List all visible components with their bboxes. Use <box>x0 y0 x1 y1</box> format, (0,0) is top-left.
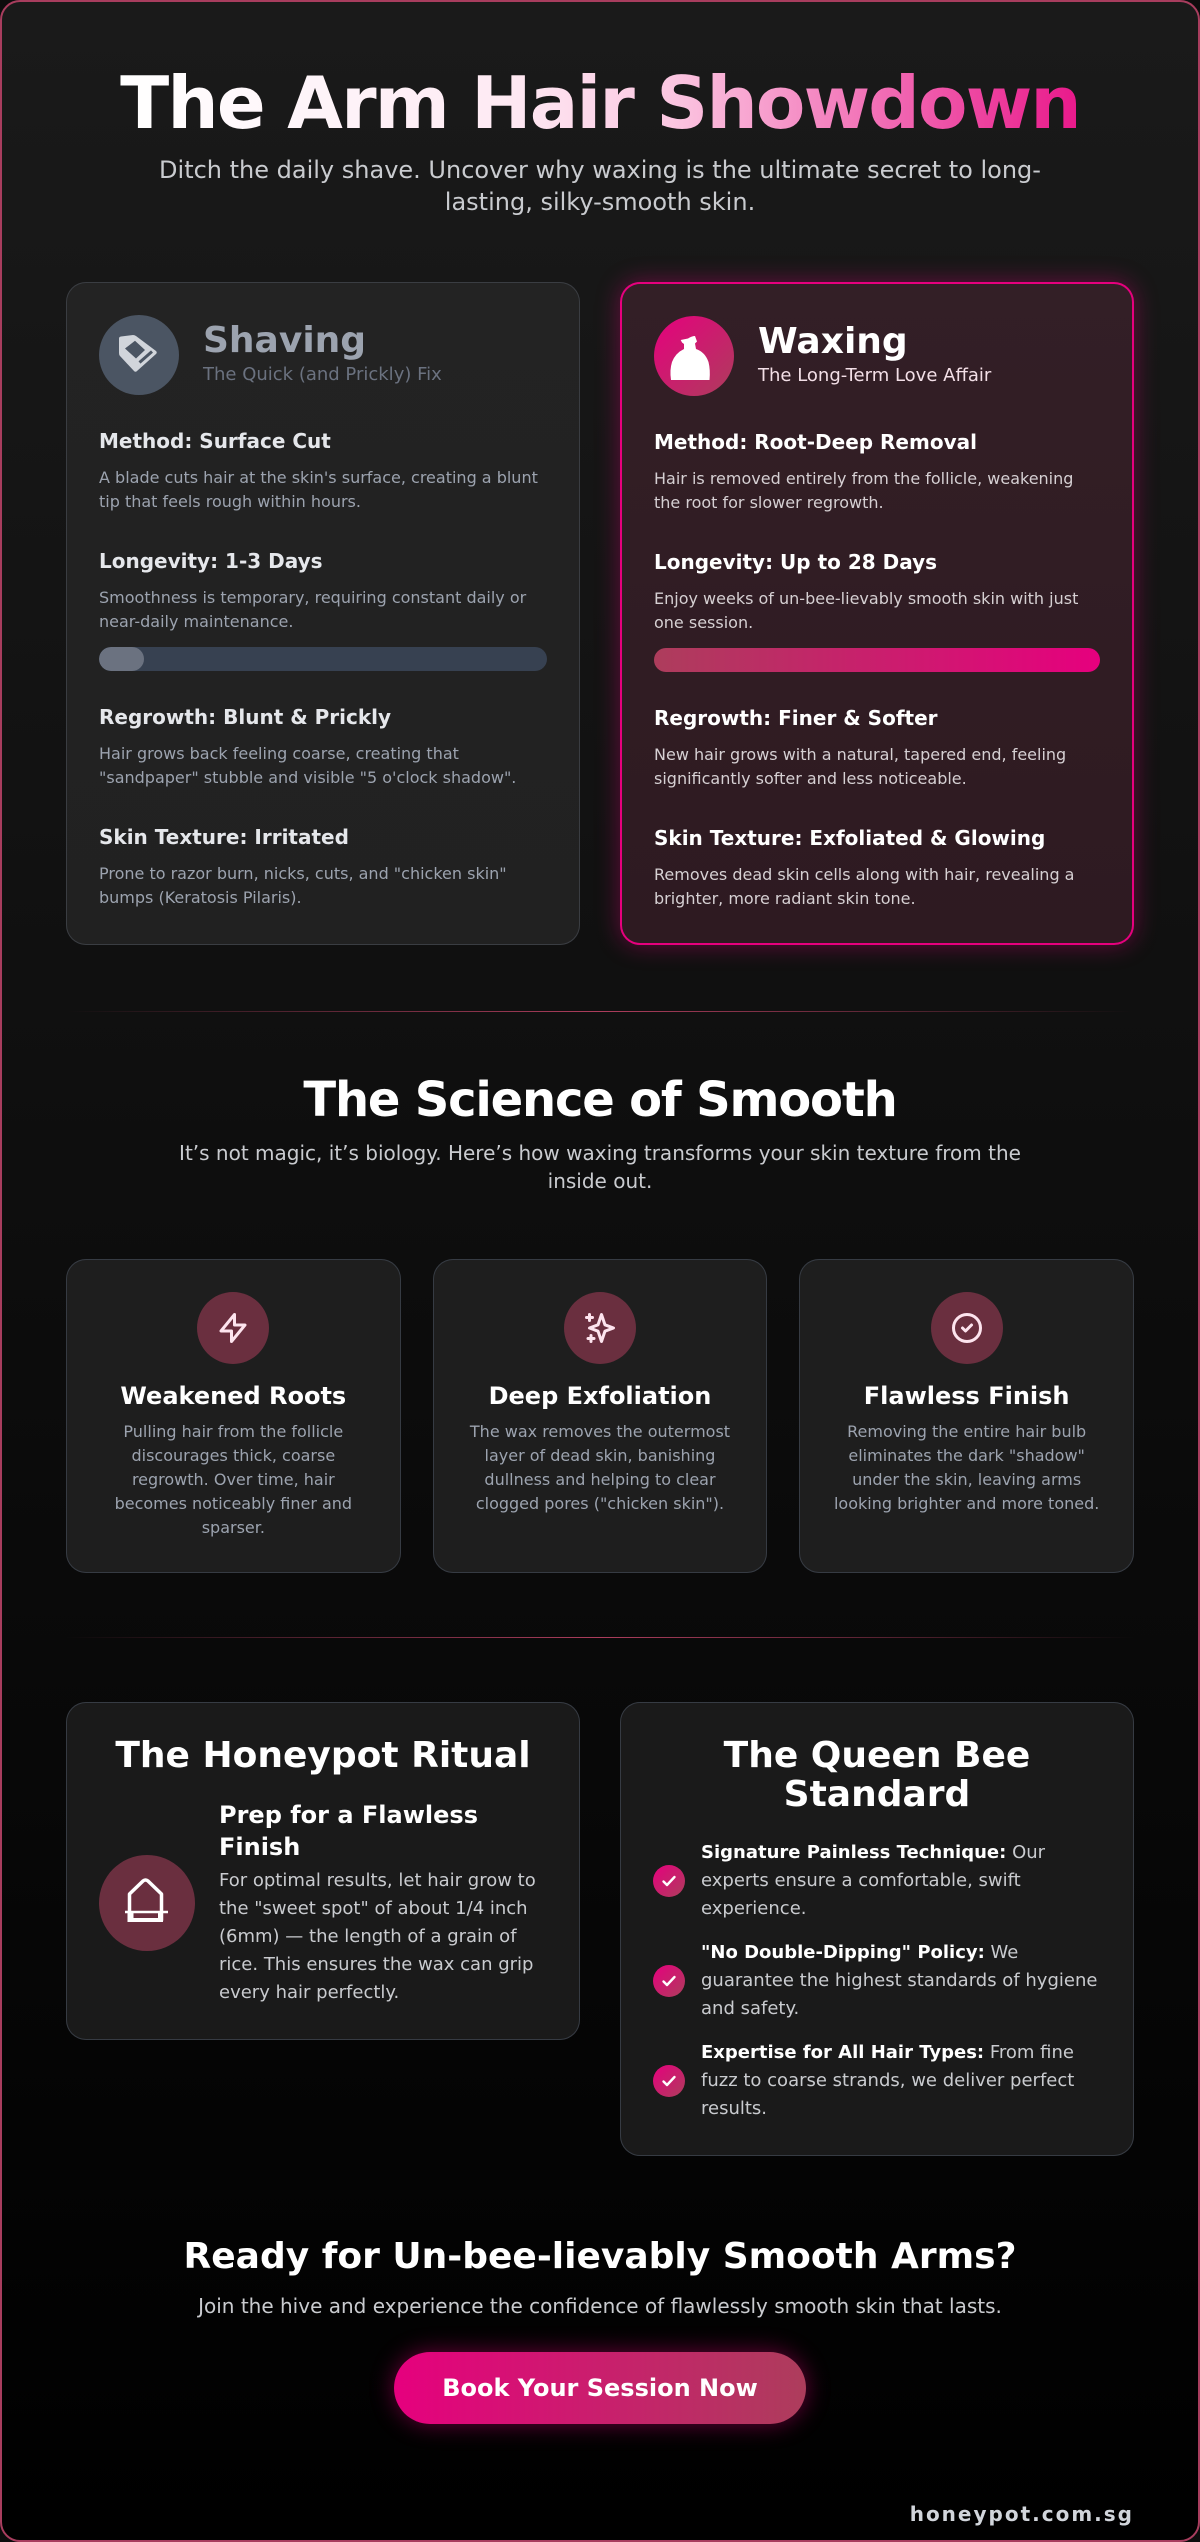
title: The Arm Hair Showdown <box>120 61 1080 145</box>
cta button <box>394 2352 806 2424</box>
card text: looking brighter and more toned. <box>834 1494 1099 1513</box>
panel title: Standard <box>784 1774 970 1815</box>
icon: sparkles <box>564 1292 636 1364</box>
regrowth text: significantly softer and less noticeable. <box>654 769 967 788</box>
benefit 3: Expertise for All Hair Types: From fine <box>701 2042 1074 2063</box>
regrowth text <box>654 745 1066 788</box>
benefit 3 <box>701 2042 1074 2119</box>
longevity text: Smoothness is temporary, requiring constant daily or <box>99 588 526 607</box>
skin texture heading: Skin Texture: Exfoliated & Glowing <box>654 826 1045 850</box>
card text <box>470 1422 730 1513</box>
skin texture text: Prone to razor burn, nicks, cuts, and "chicken skin" <box>99 864 507 883</box>
method text: Hair is removed entirely from the follicle, weakening <box>654 469 1073 488</box>
benefit 1: Signature Painless Technique: Our <box>701 1842 1045 1863</box>
card text: Removing the entire hair bulb <box>847 1422 1086 1441</box>
panel title <box>724 1735 1030 1815</box>
panel: shaving <box>66 282 580 945</box>
benefit 2: "No Double-Dipping" Policy: We <box>701 1942 1018 1963</box>
check icon 1 <box>653 1865 685 1897</box>
longevity text: near-daily maintenance. <box>99 612 293 631</box>
body text: (6mm) — the length of a grain of <box>219 1926 517 1947</box>
longevity text: one session. <box>654 613 753 632</box>
subheading: Finish <box>219 1833 300 1861</box>
icon: lightning <box>197 1292 269 1364</box>
longevity bar <box>654 648 1100 672</box>
method heading: Method: Root-Deep Removal <box>654 430 977 454</box>
icon: wax pot <box>654 316 734 396</box>
card text: clogged pores ("chicken skin"). <box>476 1494 724 1513</box>
check icon 3 <box>653 2065 685 2097</box>
regrowth heading: Regrowth: Finer & Softer <box>654 706 938 730</box>
card text: sparser. <box>202 1518 265 1537</box>
footer url: honeypot.com.sg <box>910 2502 1134 2526</box>
regrowth heading: Regrowth: Blunt & Prickly <box>99 705 391 729</box>
benefit 1: experts ensure a comfortable, swift <box>701 1870 1021 1891</box>
method text: the root for slower regrowth. <box>654 493 884 512</box>
subtitle <box>159 156 1041 216</box>
regrowth text: New hair grows with a natural, tapered end, feeling <box>654 745 1066 764</box>
regrowth text: Hair grows back feeling coarse, creating that <box>99 744 459 763</box>
skin texture text: Removes dead skin cells along with hair, revealing a <box>654 865 1074 884</box>
panel title: The Queen Bee <box>724 1735 1030 1776</box>
heading: Shaving: Shaving <box>203 320 366 361</box>
body text: For optimal results, let hair grow to <box>219 1870 536 1891</box>
longevity bar <box>99 647 547 671</box>
card title: Flawless Finish <box>864 1382 1070 1410</box>
section intro: It’s not magic, it’s biology. Here’s how waxing transforms your skin texture from the <box>179 1141 1021 1165</box>
panel: flawless finish <box>799 1259 1134 1573</box>
panel: honeypot ritual <box>66 1702 580 2040</box>
card text: eliminates the dark "shadow" <box>848 1446 1085 1465</box>
benefit 2: guarantee the highest standards of hygiene <box>701 1970 1097 1991</box>
body text: every hair perfectly. <box>219 1982 399 2003</box>
longevity text: Enjoy weeks of un-bee-lievably smooth skin with just <box>654 589 1078 608</box>
skin texture text <box>99 864 507 907</box>
panel: deep exfoliation <box>433 1259 767 1573</box>
body text <box>219 1870 536 2003</box>
method text: tip that feels rough within hours. <box>99 492 361 511</box>
tagline: The Long-Term Love Affair <box>758 365 991 386</box>
card text: regrowth. Over time, hair <box>132 1470 335 1489</box>
card text: dullness and helping to clear <box>484 1470 716 1489</box>
panel: weakened roots <box>66 1259 401 1573</box>
subtitle: lasting, silky-smooth skin. <box>445 188 755 216</box>
check icon 2 <box>653 1965 685 1997</box>
card text: becomes noticeably finer and <box>115 1494 352 1513</box>
cta text: Join the hive and experience the confidence of flawlessly smooth skin that lasts. <box>198 2294 1002 2318</box>
benefit 2 <box>701 1942 1097 2019</box>
tagline: The Quick (and Prickly) Fix <box>203 364 442 385</box>
panel title: The Honeypot Ritual <box>115 1735 531 1776</box>
body text: the "sweet spot" of about 1/4 inch <box>219 1898 528 1919</box>
method heading: Method: Surface Cut <box>99 429 331 453</box>
skin texture heading: Skin Texture: Irritated <box>99 825 349 849</box>
card text: discourages thick, coarse <box>131 1446 335 1465</box>
regrowth text <box>99 744 516 787</box>
longevity text <box>654 589 1078 632</box>
longevity heading: Longevity: 1-3 Days <box>99 549 323 573</box>
method text: A blade cuts hair at the skin's surface, creating a blunt <box>99 468 538 487</box>
panel: waxing <box>620 282 1134 945</box>
skin texture text: bumps (Keratosis Pilaris). <box>99 888 302 907</box>
card text: under the skin, leaving arms <box>852 1470 1081 1489</box>
skin texture text <box>654 865 1074 908</box>
cta button: Book Your Session Now <box>442 2374 758 2402</box>
longevity heading: Longevity: Up to 28 Days <box>654 550 937 574</box>
icon: honey pot <box>99 1855 195 1951</box>
method text <box>654 469 1073 512</box>
heading: Waxing: Waxing <box>758 321 908 362</box>
benefit 1: experience. <box>701 1898 806 1919</box>
card text <box>834 1422 1099 1513</box>
subtitle: Ditch the daily shave. Uncover why waxing is the ultimate secret to long- <box>159 156 1041 184</box>
body text: rice. This ensures the wax can grip <box>219 1954 533 1975</box>
subheading: Prep for a Flawless <box>219 1801 478 1829</box>
regrowth text: "sandpaper" stubble and visible "5 o'clock shadow". <box>99 768 516 787</box>
icon: check circle <box>931 1292 1003 1364</box>
panel: queen bee standard <box>620 1702 1134 2156</box>
method text <box>99 468 538 511</box>
section intro <box>179 1141 1021 1193</box>
benefit 3: results. <box>701 2098 767 2119</box>
benefit 2: and safety. <box>701 1998 799 2019</box>
benefit 1 <box>701 1842 1045 1919</box>
card text: layer of dead skin, banishing <box>485 1446 715 1465</box>
skin texture text: brighter, more radiant skin tone. <box>654 889 916 908</box>
card text: Pulling hair from the follicle <box>123 1422 343 1441</box>
longevity text <box>99 588 526 631</box>
card text <box>115 1422 352 1537</box>
section heading: science: The Science of Smooth <box>303 1072 897 1128</box>
card title: Weakened Roots <box>120 1382 346 1410</box>
benefit 3: fuzz to coarse strands, we deliver perfect <box>701 2070 1074 2091</box>
icon: razor tag <box>99 315 179 395</box>
cta heading: Ready for Un-bee-lievably Smooth Arms? <box>184 2236 1016 2277</box>
card title: Deep Exfoliation <box>489 1382 711 1410</box>
subheading <box>219 1801 478 1861</box>
card text: The wax removes the outermost <box>470 1422 730 1441</box>
section intro: inside out. <box>548 1169 652 1193</box>
